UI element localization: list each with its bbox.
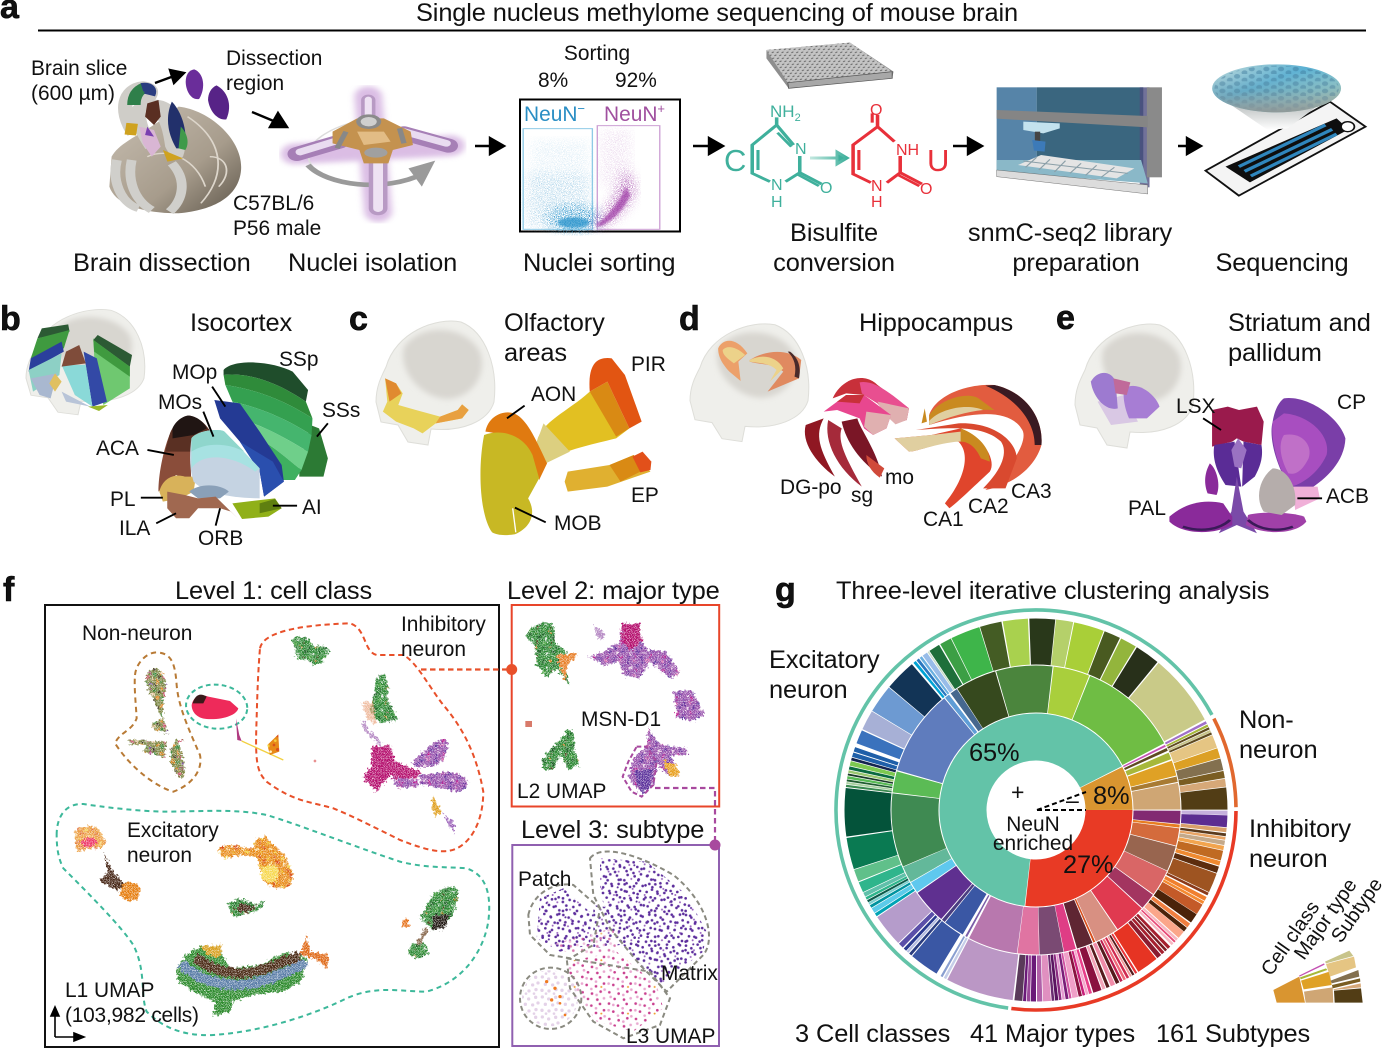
- bottom caption: cell classes: 3 Cell classes: [795, 1020, 950, 1048]
- arrow: isolation to sorting: [475, 138, 504, 154]
- UMAP clusters: level 3: [520, 852, 709, 1038]
- illustration: centrifuge rotor: [295, 97, 451, 212]
- 3D model: striatal regions: [1169, 398, 1345, 533]
- heading: olfactory areas: [504, 309, 605, 367]
- region labels: isocortex: SSs: [322, 399, 360, 422]
- center dashes: NeuN fraction: [1037, 792, 1086, 810]
- region: dentate gyrus: [805, 378, 909, 487]
- step label: nuclei isolation: Nuclei isolation: [288, 249, 457, 277]
- panel letter b: b: [0, 300, 21, 338]
- center sign: minus: –: [1066, 787, 1079, 813]
- region: CP: [1272, 398, 1345, 490]
- ring: subtype: [798, 572, 1274, 1048]
- region: PAL: [1169, 477, 1306, 533]
- region labels: hippocampus: mo: [885, 466, 914, 489]
- region labels: isocortex: AI: [302, 496, 322, 519]
- step label: brain dissection: Brain dissection: [73, 249, 251, 277]
- region labels: olfactory: EP: [631, 484, 659, 507]
- illustration: mouse brain with slices: [109, 69, 241, 213]
- region labels: striatum: CP: [1337, 391, 1366, 414]
- label: Patch: Patch: [518, 868, 571, 891]
- group label: excitatory neuron: neuron: [769, 676, 847, 704]
- group label: non-neuron: neuron: [1239, 736, 1317, 764]
- center sign: plus: +: [1011, 779, 1024, 805]
- outline: Matrix lower: [567, 958, 670, 1038]
- region: LSX: [1212, 407, 1264, 447]
- region labels: olfactory: PIR: [631, 353, 666, 376]
- connector dot: level 2: [506, 664, 517, 675]
- label: inhibitory neuron: neuron: [401, 638, 466, 661]
- region labels: striatum: [1128, 391, 1369, 520]
- arrow: C to U conversion: [810, 152, 847, 164]
- percent: inhibitory: 27%: [1063, 851, 1114, 879]
- region: CA2: [916, 423, 1017, 488]
- label: mouse age: P56 male: [233, 217, 321, 240]
- region labels: isocortex: SSp: [279, 348, 318, 371]
- small brain: isocortex location: [26, 309, 145, 415]
- gate label: NeuN negative: NeuN: [524, 103, 577, 126]
- group label: excitatory neuron: Excitatory: [769, 646, 880, 674]
- gate label: NeuN negative: −: [577, 101, 585, 116]
- illustration: flow cell and wafer: [1206, 64, 1365, 196]
- region labels: hippocampus: CA1: [923, 508, 964, 531]
- panel letter e: e: [1056, 299, 1075, 337]
- region: ACA: [158, 416, 210, 492]
- 3D model: hippocampal regions: [805, 378, 1042, 508]
- bottom caption: major types: 41 Major types: [970, 1020, 1135, 1048]
- bottom caption: subtypes: 161 Subtypes: [1156, 1020, 1310, 1048]
- region: AI: [232, 498, 282, 519]
- label: L1 UMAP: L1 UMAP: [65, 979, 154, 1002]
- step label: nuclei sorting: Nuclei sorting: [523, 249, 675, 277]
- step label: bisulfite conversion: [773, 219, 895, 277]
- outline: red excitatory cluster: [184, 682, 249, 731]
- group label: non-neuron: [1239, 706, 1317, 764]
- level 3 frame: [512, 845, 719, 1046]
- cluster: red: [192, 695, 316, 762]
- panel b: isocortex: [0, 300, 360, 550]
- ring: major type: [865, 639, 1207, 981]
- arrow: slice to region: [155, 70, 184, 83]
- region labels: striatum: PAL: [1128, 497, 1166, 520]
- heading: hippocampus: Hippocampus: [859, 309, 1013, 337]
- label: MSN-D1: MSN-D1: [581, 708, 661, 731]
- step label: bisulfite conversion: Bisulfite: [790, 219, 878, 247]
- region: SSp: [224, 362, 312, 480]
- atom labels: uracil: [870, 102, 949, 211]
- region: periwinkle front: [189, 485, 229, 498]
- level 2 frame: [512, 605, 719, 806]
- group label: inhibitory neuron: neuron: [1249, 845, 1327, 873]
- region labels: isocortex: [96, 348, 360, 550]
- region labels: hippocampus: [780, 466, 1052, 531]
- heading: striatum and pallidum: Striatum and: [1228, 309, 1371, 337]
- label: mouse strain: C57BL/6: [233, 192, 314, 215]
- heading: three-level clustering: Three-level iterative clustering analysis: [836, 577, 1269, 605]
- group label: inhibitory neuron: [1249, 815, 1351, 873]
- percent: non-neuron: 8%: [1093, 782, 1130, 810]
- 3D model: olfactory regions: [480, 358, 651, 535]
- cluster: non-neuron: [129, 668, 184, 778]
- atom labels: cytosine: N: [795, 141, 807, 158]
- atom labels: uracil: NH: [896, 142, 919, 159]
- UMAP clusters: level 1: [57, 623, 489, 1035]
- label: Matrix: Matrix: [661, 962, 718, 985]
- gate label: NeuN positive: NeuN: [604, 103, 657, 126]
- label: brain slice: Brain slice: [31, 57, 127, 80]
- outline: MSN-D1: [623, 747, 657, 797]
- region labels: olfactory: MOB: [554, 512, 602, 535]
- label: excitatory neuron: neuron: [127, 844, 192, 867]
- panel d: hippocampus: [679, 300, 1052, 531]
- small brain: striatum location: [1075, 324, 1194, 448]
- heading: olfactory areas: areas: [504, 339, 567, 367]
- panel f: UMAP levels: [3, 571, 720, 1048]
- ring legend wedge: Major type: [1290, 875, 1362, 964]
- region: teardrop left: [1205, 463, 1218, 495]
- region labels: isocortex: MOs: [158, 391, 202, 414]
- region: PIR: [537, 358, 642, 463]
- label: excitatory neuron: Excitatory: [127, 819, 219, 842]
- sorting heading: Sorting: [564, 42, 630, 65]
- label: dissection: Dissection: [226, 47, 322, 70]
- percent NeuN negative: 8%: [538, 69, 568, 92]
- region labels: hippocampus: DG-po: [780, 476, 842, 499]
- leader lines: [1203, 418, 1322, 498]
- heading: level 1: Level 1: cell class: [175, 577, 372, 605]
- ring: cell class: [938, 712, 1134, 908]
- step label: library preparation: snmC-seq2 library: [968, 219, 1173, 247]
- panel letter c: c: [349, 300, 368, 338]
- panel: nuclei sorting plot: [520, 42, 680, 232]
- label: region: region: [226, 72, 284, 95]
- UMAP clusters: level 2: [525, 622, 705, 797]
- group label: excitatory neuron: [769, 646, 880, 704]
- region: ORB: [167, 492, 238, 518]
- region: CA1: [895, 428, 992, 508]
- region: AON: [485, 412, 547, 480]
- connector: level 1 to level 2: [421, 668, 511, 671]
- label: non-neuron: Non-neuron: [82, 622, 192, 645]
- outline: Matrix upper: [590, 852, 709, 992]
- region labels: striatum: LSX: [1176, 395, 1216, 418]
- region: ACB back: [1293, 487, 1320, 510]
- plot frame: [520, 100, 680, 232]
- percent NeuN positive: 92%: [615, 69, 657, 92]
- outline: inhibitory: [256, 623, 483, 851]
- outline: non-neuron: [115, 652, 200, 792]
- outline: Patch: [528, 884, 600, 958]
- panel g: clustering sunburst: [767, 541, 1384, 1048]
- atom labels: cytosine: [724, 102, 832, 211]
- atom labels: uracil: O: [870, 102, 882, 119]
- atom labels: cytosine: 2: [795, 112, 801, 124]
- icon: dissected region 2: [208, 85, 229, 119]
- ring legend wedge: Cell class: [1257, 897, 1324, 980]
- illustration: library prep robot: [997, 87, 1162, 194]
- panel letter f: f: [3, 571, 15, 609]
- atom labels: cytosine: O: [820, 180, 832, 197]
- atom labels: cytosine: NH: [770, 102, 795, 121]
- panel c: olfactory areas: [349, 300, 666, 535]
- panel letter d: d: [679, 300, 700, 338]
- region: EP: [565, 452, 651, 492]
- step label: sequencing: Sequencing: [1215, 249, 1349, 277]
- label: inhibitory neuron: [401, 613, 486, 661]
- region: septal purple: [1214, 438, 1262, 487]
- region labels: hippocampus: sg: [851, 484, 873, 507]
- region labels: isocortex: PL: [110, 488, 136, 511]
- group label: non-neuron: Non-: [1239, 706, 1294, 734]
- connector dot: level 3: [710, 840, 720, 850]
- region labels: hippocampus: CA3: [1011, 480, 1052, 503]
- scatter: FACS populations: [523, 126, 660, 232]
- icon: 384-well plate: [766, 43, 894, 88]
- label: L3 UMAP: L3 UMAP: [626, 1025, 715, 1048]
- outline: excitatory: [57, 804, 489, 1035]
- atom labels: cytosine: C: [724, 143, 746, 178]
- outer arcs: cell class groups: [767, 541, 1305, 1048]
- percent: excitatory: 65%: [969, 739, 1020, 767]
- region labels: isocortex: ACA: [96, 437, 139, 460]
- label: L1 UMAP: (103,982 cells): [65, 1004, 199, 1027]
- label: excitatory neuron: [127, 819, 219, 867]
- group label: inhibitory neuron: Inhibitory: [1249, 815, 1351, 843]
- arrow: sorting to bisulfite: [693, 138, 723, 154]
- leader lines: [507, 406, 546, 522]
- region: MOp: [214, 400, 284, 497]
- atom labels: uracil: O: [920, 181, 932, 198]
- atom labels: cytosine: N: [771, 177, 783, 194]
- label: L2 UMAP: L2 UMAP: [517, 780, 606, 803]
- center label: NeuN enriched: NeuN: [1006, 813, 1060, 836]
- heading: level 2: Level 2: major type: [507, 577, 720, 605]
- small brain: hippocampus location: [690, 324, 809, 442]
- region labels: isocortex: MOp: [172, 361, 217, 384]
- heading: olfactory areas: Olfactory: [504, 309, 605, 337]
- chemical structure: uracil: [853, 113, 922, 186]
- connector: level 2 to level 3: [655, 788, 715, 845]
- label: slice thickness: (600 µm): [31, 82, 115, 105]
- arrow: library to sequencing: [1178, 138, 1201, 154]
- arrow: bisulfite to library: [953, 138, 982, 154]
- panel e: striatum and pallidum: [1056, 299, 1371, 533]
- sunburst chart: [767, 541, 1305, 1048]
- small brain: olfactory location: [376, 321, 495, 445]
- atom labels: uracil: H: [871, 194, 883, 211]
- ring legend wedge: [1257, 874, 1384, 1003]
- step label: library preparation: [968, 219, 1173, 277]
- level 1 frame: [45, 605, 499, 1047]
- heading: striatum and pallidum: [1228, 309, 1371, 367]
- region: PL: [159, 476, 196, 502]
- step label: bisulfite conversion: conversion: [773, 249, 895, 277]
- heading: level 3: Level 3: subtype: [521, 816, 704, 844]
- panel letter g: g: [775, 571, 796, 609]
- step label: library preparation: preparation: [1012, 249, 1140, 277]
- icon: dissected regions: [186, 69, 203, 99]
- region labels: olfactory: [531, 353, 666, 535]
- atom labels: uracil: N: [871, 178, 883, 195]
- arrow: region to isolation: [252, 112, 287, 127]
- region labels: striatum: ACB: [1326, 485, 1369, 508]
- region labels: isocortex: ORB: [198, 527, 243, 550]
- axes arrows: UMAP: [51, 1007, 84, 1041]
- panel a: methylome sequencing workflow: [0, 0, 1366, 277]
- center label: NeuN enriched: enriched: [993, 832, 1073, 855]
- region: SSs: [299, 425, 328, 477]
- region: ACB: [1259, 468, 1295, 515]
- region labels: olfactory: AON: [531, 383, 576, 406]
- atom labels: uracil: U: [927, 143, 949, 178]
- 3D model: isocortex regions: [141, 362, 328, 526]
- region: MOs: [190, 430, 260, 498]
- cluster: excitatory: [74, 826, 458, 1017]
- label: inhibitory neuron: Inhibitory: [401, 613, 486, 636]
- gate label: NeuN positive: +: [657, 101, 665, 116]
- outline: left cluster: [520, 968, 581, 1029]
- atom labels: cytosine: H: [771, 194, 783, 211]
- region labels: hippocampus: CA2: [968, 495, 1009, 518]
- label: L1 UMAP: [65, 979, 199, 1027]
- heading: striatum and pallidum: pallidum: [1228, 339, 1322, 367]
- leader lines: [141, 387, 328, 526]
- chemical structure: cytosine: [752, 117, 822, 186]
- cluster: inhibitory: [292, 637, 468, 832]
- heading: isocortex: Isocortex: [190, 309, 293, 337]
- center label: NeuN enriched: [993, 813, 1073, 855]
- region: MOB: [480, 432, 539, 535]
- region: CA3: [929, 385, 1042, 490]
- region labels: isocortex: ILA: [119, 517, 150, 540]
